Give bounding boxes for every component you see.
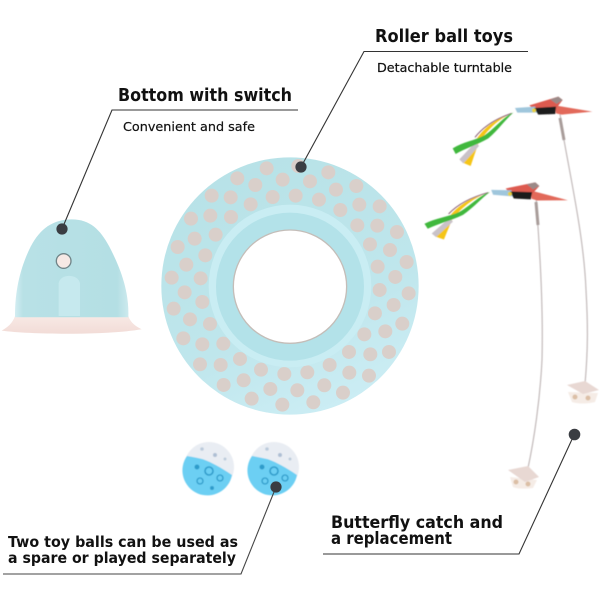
- perforation holes: [165, 159, 416, 412]
- spring coil 1: [560, 118, 564, 140]
- panel: butterfly wand toys: [424, 97, 599, 489]
- spring coil 2: [536, 202, 538, 225]
- raised inner collar: [209, 205, 371, 367]
- heading: Roller ball toys: Roller ball toys: [375, 26, 513, 47]
- text: butterfly description: [331, 513, 503, 549]
- butterfly 2: [424, 179, 569, 239]
- wings and body: [491, 179, 569, 203]
- butterfly 1: [453, 97, 592, 166]
- subheading: Detachable turntable: Detachable turntable: [377, 60, 512, 75]
- text: toy balls description: Two toy balls can be used as: [8, 533, 238, 551]
- switch button: [56, 254, 71, 268]
- panel: two toy balls: [182, 442, 299, 495]
- wire 1: [560, 114, 587, 384]
- panel: bell-shaped bottom base with switch: [2, 219, 142, 334]
- toy ball 2: [247, 442, 299, 495]
- callout leader: butterfly catch: [323, 429, 580, 554]
- ribbons: [424, 192, 490, 239]
- callout leader: toy balls: [3, 481, 282, 574]
- ribbons: [453, 113, 513, 166]
- glossy highlight: [59, 276, 80, 316]
- text: butterfly description: a replacement: [331, 529, 452, 549]
- panel: perforated turntable ring: [161, 157, 419, 415]
- centre hole: [233, 230, 347, 343]
- text: toy balls description: a spare or played separately: [8, 549, 236, 567]
- suction base 1: [567, 381, 599, 404]
- wings and body: [515, 97, 592, 115]
- base skirt: [2, 316, 142, 334]
- heading: Bottom with switch: Bottom with switch: [118, 85, 292, 106]
- ring disc: [161, 157, 419, 415]
- callout leader: bottom with switch: [56, 110, 298, 235]
- dome body: [15, 219, 128, 317]
- callout leader: roller ball toys: [295, 52, 528, 173]
- subheading: Convenient and safe: Convenient and safe: [123, 119, 255, 134]
- text: toy balls description: [8, 533, 238, 567]
- wire 2: [528, 196, 542, 468]
- suction base 2: [508, 466, 539, 489]
- text: butterfly description: Butterfly catch and: [331, 513, 503, 533]
- toy ball 1: [182, 442, 234, 495]
